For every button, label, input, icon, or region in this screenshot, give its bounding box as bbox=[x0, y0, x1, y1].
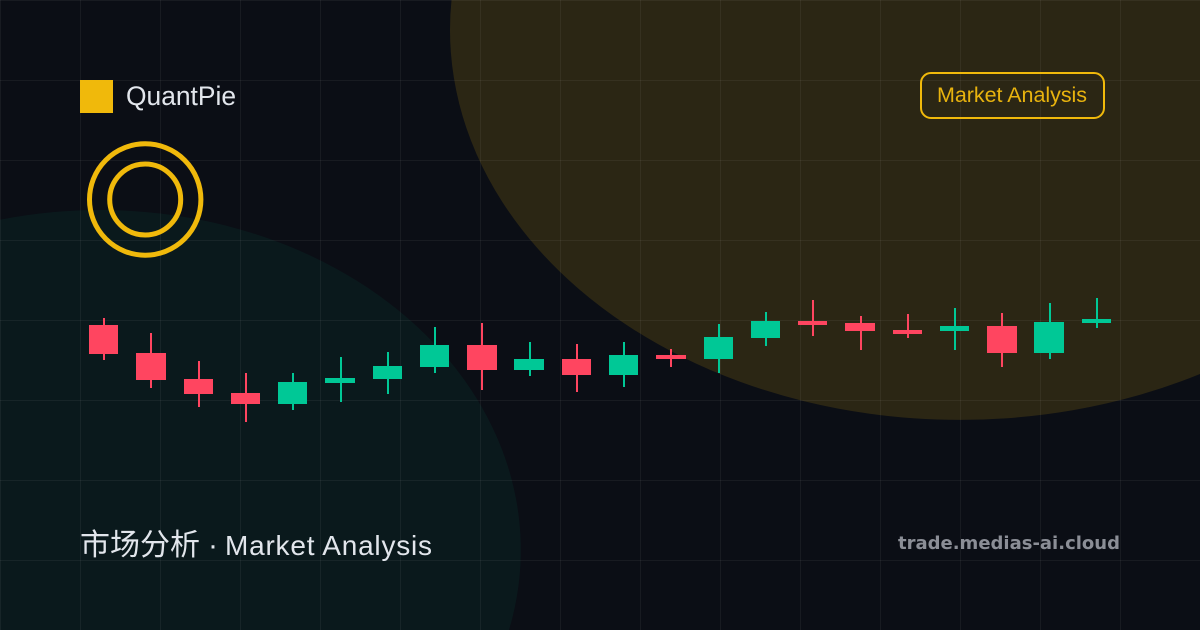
candle 11 bbox=[562, 344, 591, 392]
candle 16 bbox=[798, 300, 827, 336]
candle 14 bbox=[704, 324, 733, 373]
badge: Market Analysis: Market Analysis bbox=[937, 83, 1087, 107]
website url: trade.medias-ai.cloud bbox=[898, 533, 1120, 554]
icon: logo square bbox=[80, 80, 113, 113]
brand name: QuantPie bbox=[126, 81, 236, 111]
badge: Market Analysis bbox=[921, 73, 1104, 118]
candle 12 bbox=[609, 342, 638, 387]
title: bottom caption: Market Analysis bbox=[225, 530, 432, 561]
candle 18 bbox=[893, 314, 922, 338]
icon: concentric rings bbox=[90, 144, 201, 255]
candle 4 bbox=[231, 373, 260, 422]
candle 22 bbox=[1082, 298, 1111, 328]
logo: QuantPie brand bbox=[80, 80, 236, 113]
candle 9 bbox=[467, 323, 497, 390]
candle 5 bbox=[278, 373, 307, 410]
candle 6 bbox=[325, 357, 355, 402]
candle 17 bbox=[845, 316, 875, 350]
candle 20 bbox=[987, 313, 1017, 367]
title: bottom caption bbox=[80, 529, 432, 562]
candlestick chart bbox=[89, 298, 1111, 422]
candle 19 bbox=[940, 308, 969, 350]
candle 1 bbox=[89, 318, 118, 360]
title: bottom caption: · bbox=[208, 529, 218, 562]
candle 8 bbox=[420, 327, 449, 373]
candle 13 bbox=[656, 349, 686, 367]
candle 15 bbox=[751, 312, 780, 346]
candle 21 bbox=[1034, 303, 1064, 359]
background shape: yellow ellipse bbox=[450, 0, 1200, 420]
candle 3 bbox=[184, 361, 213, 407]
candle 10 bbox=[514, 342, 544, 376]
candle 2 bbox=[136, 333, 166, 388]
background shape: teal ellipse bbox=[0, 210, 521, 630]
candle 7 bbox=[373, 352, 402, 394]
title: bottom caption: 市场分析 bbox=[80, 529, 200, 562]
